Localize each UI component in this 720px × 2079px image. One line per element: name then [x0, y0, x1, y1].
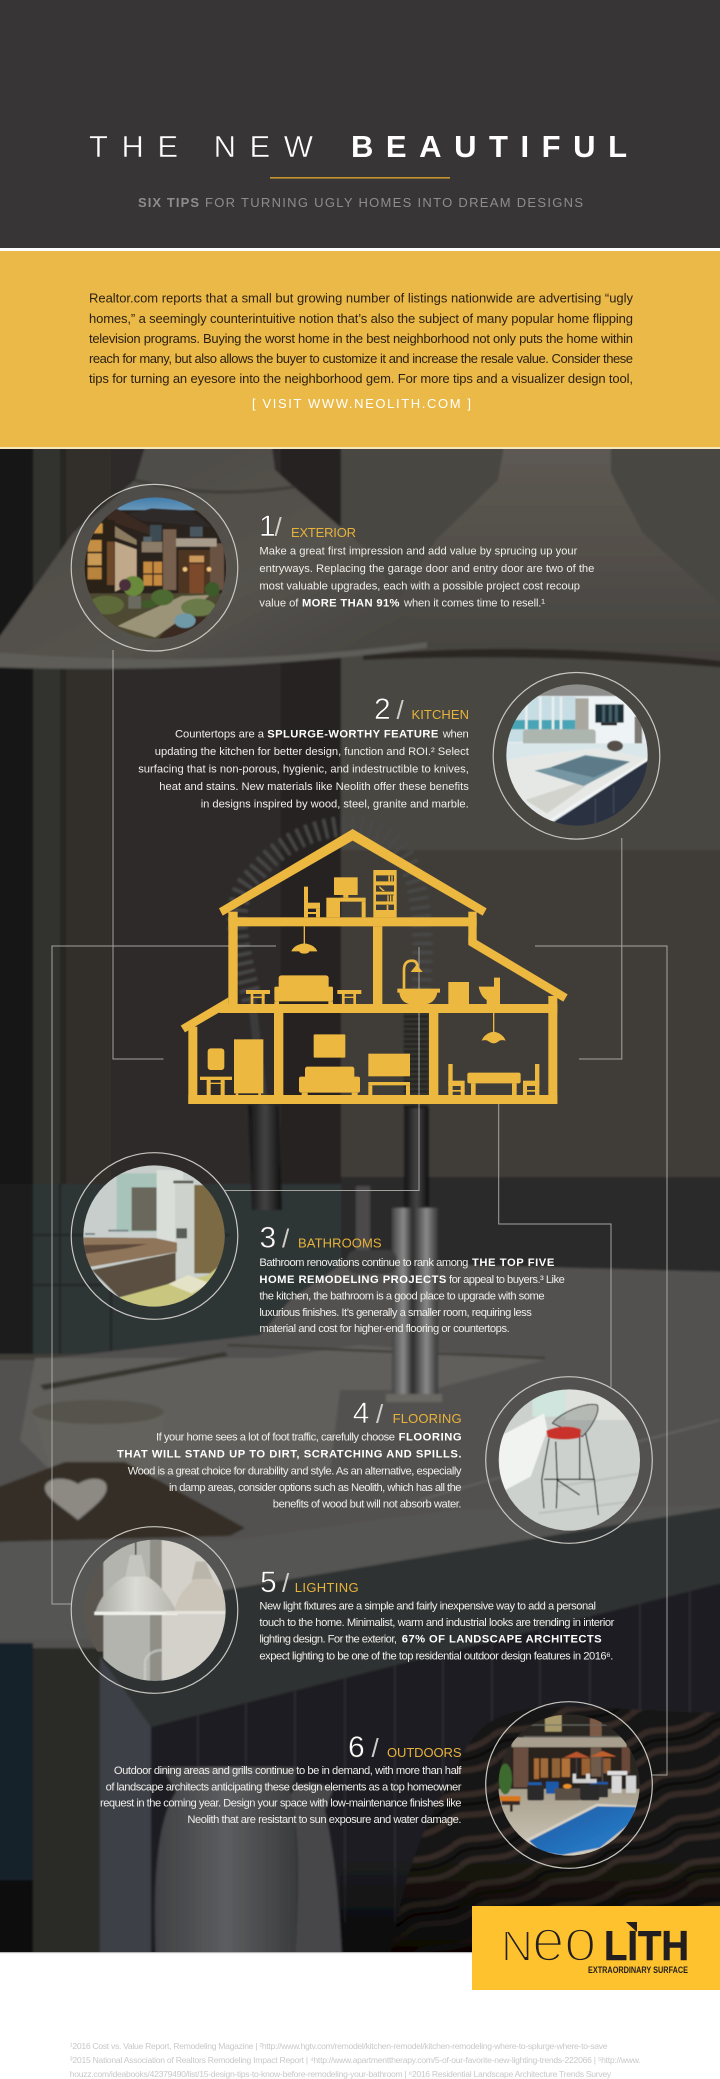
- body text 5: New light fixtures are a simple and fairly inexpensive way to add a personal: [259, 1600, 596, 1612]
- body text 1: MORE THAN 91%: [302, 598, 400, 610]
- number 3: [260, 1222, 290, 1255]
- footnotes: houzz.com/ideabooks/42379490/list/15-design-tips-to-know-before-remodeling-your-bathroom | ⁶2016 Residential Landscape Architecture Trends Survey: [70, 2069, 612, 2079]
- body text 4: FLOORING: [399, 1432, 462, 1444]
- label: flooring: FLOORING: [393, 1411, 462, 1426]
- body text 3: Bathroom renovations continue to rank among: [259, 1257, 468, 1269]
- body text 4: benefits of wood but will not absorb water.: [273, 1498, 462, 1510]
- kitchen photo background: [0, 440, 720, 1968]
- body text 2: heat and stains. New materials like Neolith offer these benefits: [159, 781, 469, 793]
- label: bathrooms: BATHROOMS: [298, 1236, 382, 1251]
- body text 1: most valuable upgrades, each with a possible project cost recoup: [259, 580, 580, 592]
- number 1: 1: [259, 510, 276, 543]
- body text 1: when it comes time to resell.¹: [403, 598, 545, 610]
- ring 1: [71, 484, 238, 651]
- kitchen furniture: [200, 1039, 263, 1095]
- intro panel: [0, 251, 720, 449]
- photo: kitchen counter: [504, 683, 650, 830]
- footnotes: ¹2016 Cost vs. Value Report, Remodeling Magazine | ²http://www.hgtv.com/remodel/kitchen-remodel/kitchen-remodeling-where-to-splurge-where-to-save: [70, 2041, 608, 2051]
- number 4: /: [376, 1399, 384, 1429]
- subtitle: FOR TURNING UGLY HOMES INTO DREAM DESIGNS: [205, 195, 583, 210]
- neolith logo: LITH: [604, 1922, 689, 1969]
- darkening towards bottom: [340, 1860, 720, 1960]
- intro text: homes,” a seemingly counterintuitive notion that’s also the subject of many popular home flipping: [89, 311, 633, 326]
- vases: [290, 1783, 342, 1960]
- label: exterior: EXTERIOR: [291, 525, 356, 540]
- tip 3: bathrooms: [71, 1153, 565, 1335]
- lounge furniture: [299, 1034, 410, 1095]
- number 5: [260, 1566, 290, 1599]
- subtitle: SIX TIPS: [138, 195, 199, 210]
- pendant lamp lower: [482, 1013, 506, 1043]
- house structure: [181, 829, 568, 1104]
- body text 4: Wood is a great choice for durability and style. As an alternative, especially: [128, 1466, 462, 1478]
- footnotes: [70, 2041, 641, 2079]
- body text 4: [117, 1432, 462, 1510]
- number 6: /: [372, 1733, 380, 1763]
- body text 3: the kitchen, the bathroom is a good place to upgrade with some: [259, 1291, 545, 1303]
- marble and backsplash: [341, 1177, 720, 1277]
- wicker basket: [390, 1707, 720, 1960]
- lamps: [424, 449, 673, 564]
- footnotes: ³2015 National Association of Realtors Remodeling Impact Report | ⁴http://www.apartmenttherapy.com/5-of-our-favorite-new-lighting-trends-222066 | ⁵http://www.: [70, 2055, 641, 2065]
- photo: house exterior: [82, 495, 228, 643]
- body text 5: expect lighting to be one of the top residential outdoor design features in 2016⁶.: [259, 1650, 613, 1662]
- title rule: [270, 177, 450, 179]
- body text 2: SPLURGE-WORTHY FEATURE: [267, 728, 439, 740]
- title: [89, 129, 627, 164]
- ring 2: [493, 672, 660, 839]
- tip 1: exterior: [71, 484, 594, 651]
- intro text: [89, 290, 634, 386]
- number 5: /: [282, 1568, 290, 1598]
- ring 4: [486, 1377, 652, 1543]
- lower counter face: [87, 1506, 720, 1727]
- body text 6: of landscape architects anticipating these design elements as a top homeowner: [106, 1781, 462, 1793]
- number 6: 6: [348, 1731, 365, 1764]
- body text 4: in damp areas, consider options such as Neolith, which has all the: [169, 1482, 462, 1494]
- visit link: [ VISIT WWW.NEOLITH.COM ]: [252, 396, 471, 411]
- photo: bathroom: [82, 1163, 228, 1310]
- logo wordmark: [501, 1908, 596, 1974]
- pendant lamp upper: [291, 926, 317, 954]
- dining furniture: [448, 1064, 539, 1095]
- body text 5: touch to the home. Minimalist, warm and industrial looks are trending in interior: [259, 1617, 615, 1629]
- ring 6: [486, 1702, 652, 1868]
- body text 5: [259, 1600, 615, 1662]
- body text 5: 67% OF LANDSCAPE ARCHITECTS: [402, 1634, 602, 1646]
- body text 3: HOME REMODELING PROJECTS: [259, 1274, 447, 1286]
- logo wordmark: N: [501, 1922, 533, 1971]
- intro text: tips for turning an eyesore into the neighborhood gem. For more tips and a visualizer design tool,: [89, 371, 633, 386]
- number 3: 3: [260, 1222, 276, 1255]
- body text 1: [259, 546, 594, 610]
- intro text: Realtor.com reports that a small but growing number of listings nationwide are advertising “ugly: [89, 290, 634, 306]
- label: lighting: LIGHTING: [295, 1580, 359, 1595]
- body text 5: lighting design. For the exterior,: [259, 1634, 397, 1646]
- heart cutout: [45, 1479, 107, 1520]
- number 2: /: [396, 695, 404, 725]
- logo wordmark: o: [564, 1908, 596, 1974]
- attic furniture: [304, 870, 397, 917]
- number 5: 5: [260, 1566, 277, 1599]
- body text 1: value of: [259, 598, 299, 610]
- number 4: [353, 1397, 384, 1430]
- mug: [153, 1476, 156, 1478]
- faucet spring: [237, 826, 422, 1010]
- body text 3: for appeal to buyers.³ Like: [449, 1274, 565, 1286]
- number 2: [374, 693, 404, 726]
- intro text: reach for many, but also allows the buyer to customize it and increase the resale value. Consider these: [89, 351, 633, 366]
- body text 1: entryways. Replacing the garage door and entry door are two of the: [259, 563, 594, 575]
- body text 4: If your home sees a lot of foot traffic, carefully choose: [156, 1432, 395, 1444]
- bathroom fixtures: [397, 961, 500, 1005]
- header band: [0, 0, 720, 248]
- ring 5: [71, 1527, 238, 1693]
- title: THE NEW: [89, 129, 314, 164]
- body text 3: [259, 1257, 565, 1335]
- intro text: television programs. Buying the worst home in the best neighborhood not only puts the home within: [89, 331, 633, 346]
- body text 2: Countertops are a: [175, 728, 265, 740]
- number 2: 2: [374, 693, 391, 726]
- number 4: 4: [353, 1397, 369, 1430]
- tip 4: flooring: [117, 1377, 652, 1543]
- body text 6: [100, 1765, 462, 1826]
- label: kitchen: KITCHEN: [412, 707, 469, 722]
- tip 5: lighting: [71, 1527, 615, 1693]
- body text 2: in designs inspired by wood, steel, granite and marble.: [201, 798, 469, 810]
- body text 3: material and cost for higher-end flooring or countertops.: [259, 1323, 510, 1335]
- ring 3: [71, 1153, 238, 1319]
- body text 2: [138, 728, 470, 810]
- body text 6: Outdoor dining areas and grills continue to be in demand, with more than half: [114, 1765, 462, 1777]
- photo: stool on floor: [496, 1387, 642, 1533]
- body text 1: Make a great first impression and add value by sprucing up your: [259, 546, 578, 558]
- body text 3: luxurious finishes. It’s generally a smaller room, requiring less: [259, 1307, 532, 1319]
- body text 2: when: [442, 728, 469, 740]
- photo: pool patio: [497, 1712, 643, 1859]
- body text 2: surfacing that is non-porous, hygienic, and indestructible to knives,: [138, 763, 469, 775]
- logo tagline: EXTRAORDINARY SURFACE: [588, 1965, 688, 1976]
- body text 6: request in the coming year. Design your space with low-maintenance finishes like: [100, 1798, 462, 1810]
- connector lines: [52, 650, 667, 1775]
- label: outdoors: OUTDOORS: [387, 1745, 462, 1760]
- photo: pendant lamps: [82, 1538, 228, 1685]
- cutting board: [0, 1462, 245, 1542]
- body text 2: updating the kitchen for better design, function and ROI.² Select: [155, 746, 470, 758]
- tip 2: kitchen: [138, 672, 660, 839]
- number 1: /: [274, 512, 282, 542]
- number 3: /: [282, 1224, 290, 1254]
- house illustration: [181, 829, 568, 1104]
- number 6: [348, 1731, 380, 1764]
- logo wordmark: e: [532, 1908, 564, 1974]
- tip 6: outdoors: [100, 1702, 652, 1868]
- title: BEAUTIFUL: [351, 129, 627, 164]
- living room furniture: [246, 975, 361, 1004]
- body text 3: THE TOP FIVE: [472, 1257, 555, 1269]
- body text 6: Neolith that are resistant to sun exposure and water damage.: [187, 1814, 462, 1826]
- body text 4: THAT WILL STAND UP TO DIRT, SCRATCHING AND SPILLS.: [117, 1449, 462, 1461]
- neolith logo: [472, 1906, 720, 1990]
